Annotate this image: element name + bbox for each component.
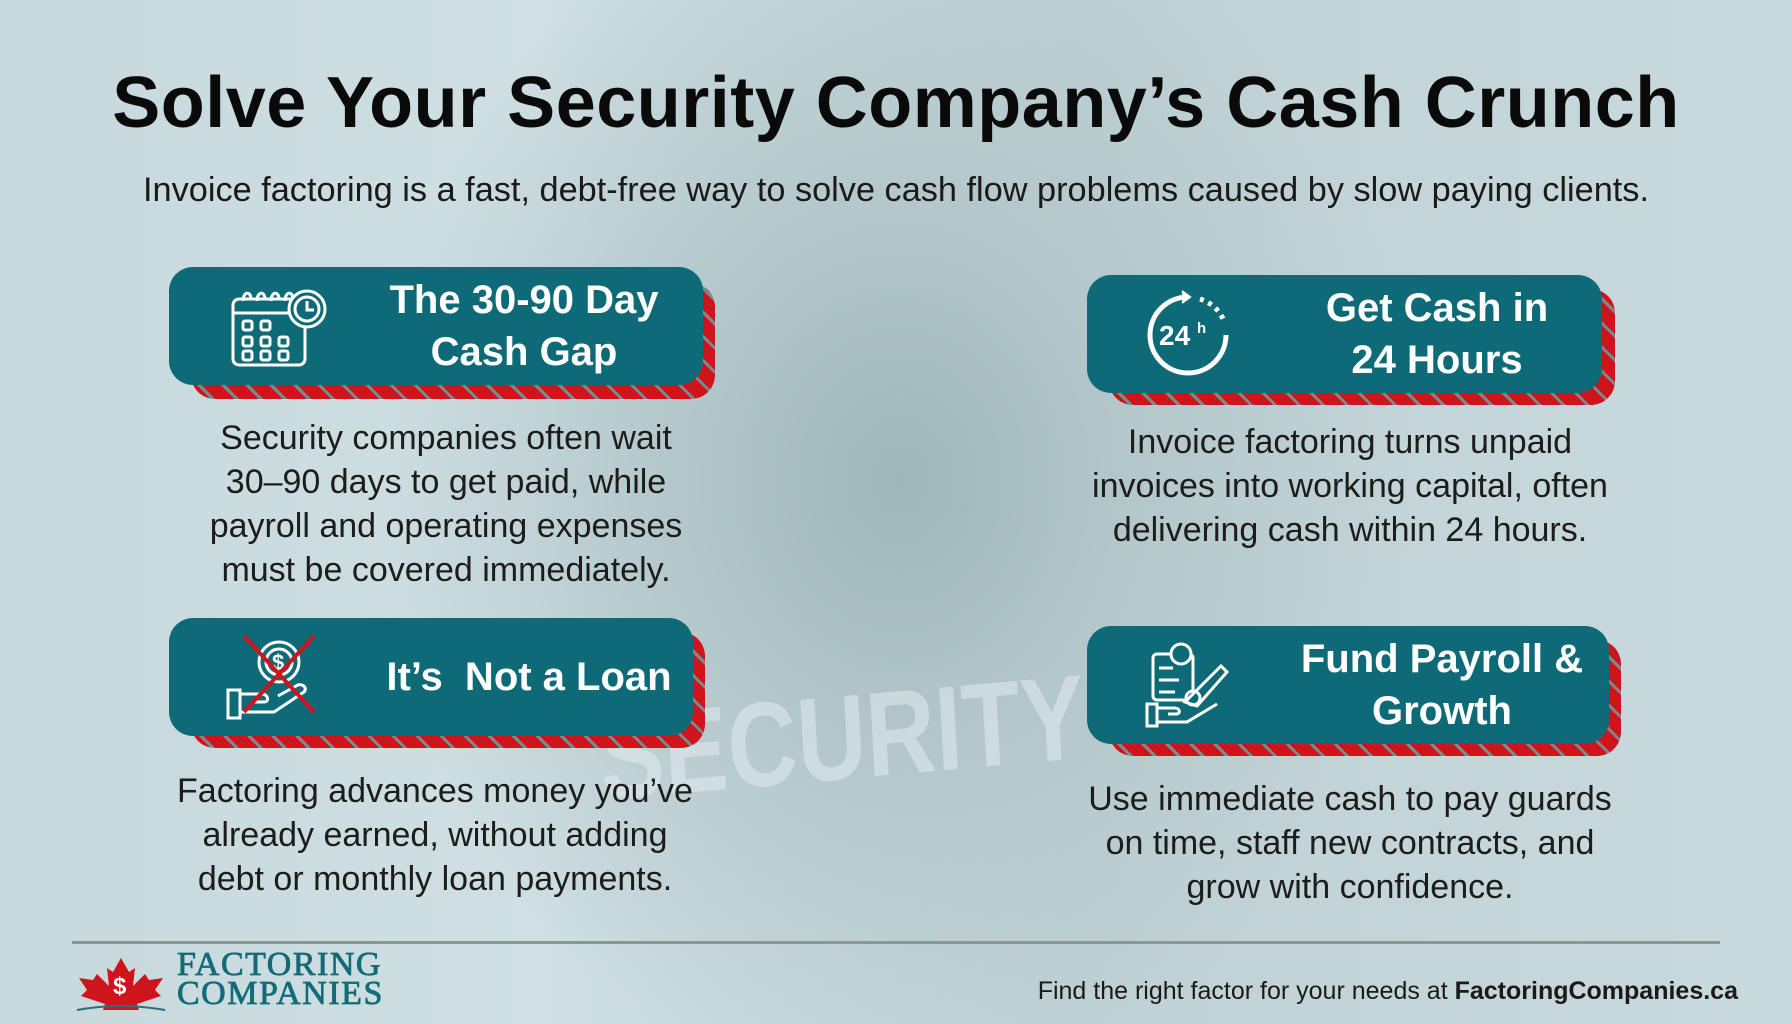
text: fund payroll: grow with confidence. [1187, 868, 1513, 906]
icon: 24h [1148, 290, 1228, 376]
footer text: Find the right factor for your needs at FactoringCompanies.ca [1038, 977, 1738, 1005]
panel: 30-90 day cash gap [169, 267, 715, 399]
text: not a loan [177, 772, 693, 898]
heading: Fund Payroll & [1301, 637, 1583, 681]
icon: 24h: 24 [1159, 320, 1191, 351]
logo text [177, 946, 384, 1012]
icon: maple leaf: $ [113, 973, 127, 1000]
text: cash gap: Security companies often wait [220, 419, 672, 457]
icon: crossed out loan: $ [272, 650, 284, 675]
text: 24 hours: Invoice factoring turns unpaid [1128, 423, 1572, 461]
heading: It’s Not a Loan [386, 655, 672, 699]
heading: The 30-90 Day [389, 278, 659, 322]
heading: 24 Hours [1351, 338, 1523, 382]
panel: fund payroll [1087, 626, 1621, 756]
subtitle: Invoice factoring is a fast, debt-free way to solve cash flow problems caused by slow paying clients. [143, 171, 1649, 209]
icon: 24h: h [1197, 320, 1206, 337]
heading: Growth [1372, 689, 1512, 733]
text: 24 hours: invoices into working capital, often [1092, 467, 1608, 505]
heading: Cash Gap [431, 330, 617, 374]
text: not a loan: Factoring advances money you’ve [177, 772, 693, 810]
heading [1326, 286, 1548, 382]
logo text: FACTORING [177, 946, 382, 983]
heading [389, 278, 659, 374]
icon: payroll hand [1146, 642, 1229, 728]
heading [1301, 637, 1583, 733]
title: Solve Your Security Company’s Cash Crunch [112, 63, 1680, 143]
heading: Get Cash in [1326, 286, 1548, 330]
text: cash gap: 30–90 days to get paid, while [226, 463, 666, 501]
icon: calendar clock [232, 290, 326, 366]
text: 24 hours [1092, 423, 1608, 549]
text: cash gap [210, 419, 682, 589]
panel: not a loan [169, 618, 705, 748]
text: cash gap: must be covered immediately. [221, 551, 671, 589]
text: not a loan: debt or monthly loan payments. [198, 860, 672, 898]
text: fund payroll: Use immediate cash to pay guards [1088, 780, 1612, 818]
logo [76, 946, 384, 1012]
icon: crossed out loan [226, 634, 316, 720]
text: fund payroll [1088, 780, 1612, 906]
text: 24 hours: delivering cash within 24 hours. [1113, 511, 1587, 549]
icon: maple leaf [76, 958, 166, 1011]
text: not a loan: already earned, without adding [202, 816, 668, 854]
text: fund payroll: on time, staff new contracts, and [1106, 824, 1594, 862]
panel: get cash in 24 hours [1087, 275, 1615, 405]
watermark: SECURITY: SECURITY [596, 650, 1088, 826]
text: cash gap: payroll and operating expenses [210, 507, 682, 545]
logo text: COMPANIES [177, 975, 384, 1012]
